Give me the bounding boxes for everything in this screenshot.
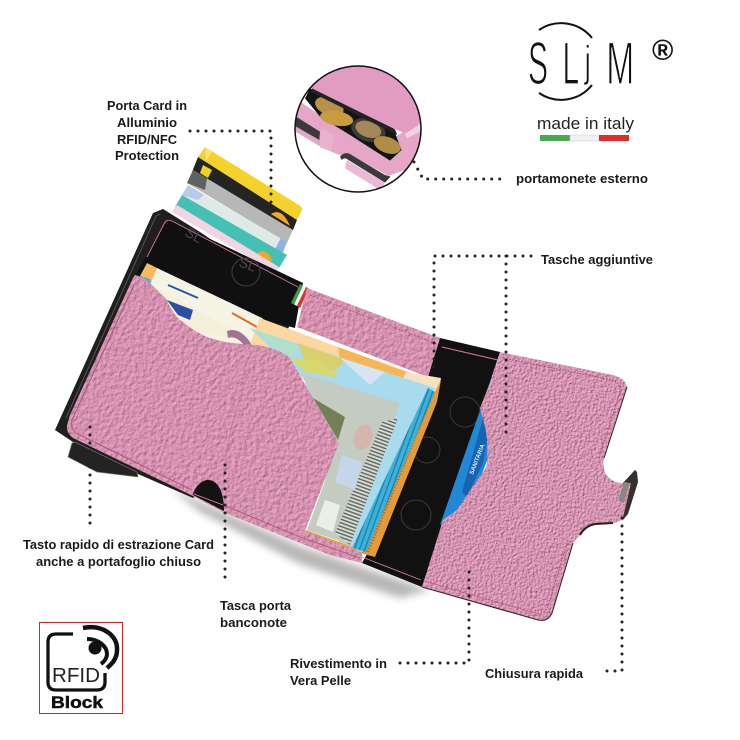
orange note [338, 347, 408, 385]
right panel stitches [424, 358, 620, 613]
callout: Tasche aggiuntive: Tasche aggiuntive [541, 252, 653, 267]
left dark rail [296, 117, 320, 140]
aluminium card case [55, 209, 300, 498]
right slot [340, 153, 391, 183]
logo: SLjM brand [528, 23, 673, 100]
logo: SLjM brand: S [528, 31, 548, 98]
peach note [250, 318, 340, 362]
callout: Tasto rapido [23, 427, 214, 569]
badge: RFID Block: RFID [52, 665, 100, 687]
callout: Rivestimento in Vera Pelle: Vera Pelle [290, 673, 351, 688]
callout: portamonete esterno: portamonete esterno [516, 171, 648, 186]
lower pink strip [345, 160, 385, 190]
cream note [150, 268, 300, 350]
bottom black notch [193, 480, 224, 511]
callout: Porta Card: Alluminio [117, 115, 177, 130]
card stack [172, 147, 302, 273]
banknotes [140, 263, 441, 557]
flap crease [225, 367, 250, 465]
extraction button [68, 442, 138, 477]
callout: Chiusura rapida [485, 518, 622, 681]
lining monograms: SL [237, 254, 259, 275]
lining monograms [182, 224, 260, 286]
middle monograms [401, 397, 480, 530]
callout: Porta Card [107, 98, 271, 205]
centre panel stitches [310, 295, 437, 344]
blue health card: SANITARIA [469, 443, 487, 476]
callout: Porta Card: Porta Card in [107, 98, 187, 113]
wallet photo [55, 147, 645, 630]
logo: SLjM brand: M [606, 31, 634, 98]
badge: RFID Block [40, 622, 122, 714]
callout: Tasto rapido: Tasto rapido di estrazione Card [23, 537, 214, 552]
blue health card [427, 376, 500, 562]
grey note [300, 373, 400, 545]
inner black lining [130, 219, 303, 328]
blue note [250, 328, 435, 552]
tagline: made in italy [537, 115, 635, 141]
bottom strip stitches [226, 506, 360, 558]
grey note stripes [335, 418, 398, 545]
snap closure [618, 470, 638, 521]
case side highlight [66, 214, 160, 418]
orange side note [352, 380, 441, 557]
coin pocket magnifier [290, 60, 427, 192]
badge: RFID Block: Block [51, 693, 104, 712]
bottom orange edge [306, 530, 362, 553]
callout: portamonete esterno [414, 162, 648, 186]
left panel stitches [72, 285, 192, 490]
lining monograms: SL [182, 224, 206, 246]
coin opening [305, 88, 402, 161]
callout: Tasto rapido: anche a portafoglio chiuso [36, 554, 201, 569]
middle black lining [362, 338, 500, 587]
callout: Tasca porta banconote: Tasca porta [220, 598, 292, 613]
callout: Tasche aggiuntive [434, 252, 653, 434]
grey note portrait [350, 422, 376, 452]
callout: Chiusura rapida: Chiusura rapida [485, 666, 584, 681]
callout: Tasca porta banconote [220, 465, 292, 630]
top flap [312, 66, 420, 134]
grey note building [313, 398, 345, 440]
right pink panel [422, 352, 635, 620]
callout: Porta Card: RFID/NFC [117, 132, 177, 147]
orange note corner [140, 263, 157, 286]
middle lining stitches [362, 347, 498, 580]
tagline: made in italy: made in italy [537, 115, 635, 133]
logo: SLjM brand: L [562, 31, 579, 98]
callout: Rivestimento in Vera Pelle: Rivestimento in [290, 656, 387, 671]
tab fold [320, 128, 333, 152]
logo: SLjM brand: ® [652, 35, 673, 67]
lower pink body [296, 102, 420, 176]
callout: Porta Card: Protection [115, 148, 179, 163]
cream note details [167, 285, 257, 345]
callout: Tasca porta banconote: banconote [220, 615, 287, 630]
wallet shadow [170, 488, 430, 598]
centre pink panel [297, 288, 440, 376]
blue note corner [140, 276, 152, 286]
grey note hologram [335, 455, 362, 490]
right panel edge [422, 387, 627, 620]
lining stitches [147, 220, 298, 287]
italian flag tag [291, 284, 309, 308]
blue note strip [352, 388, 435, 552]
left pink panel with flap [60, 270, 370, 570]
callout: Rivestimento in Vera Pelle [290, 572, 469, 688]
logo: SLjM brand: j [584, 37, 591, 85]
